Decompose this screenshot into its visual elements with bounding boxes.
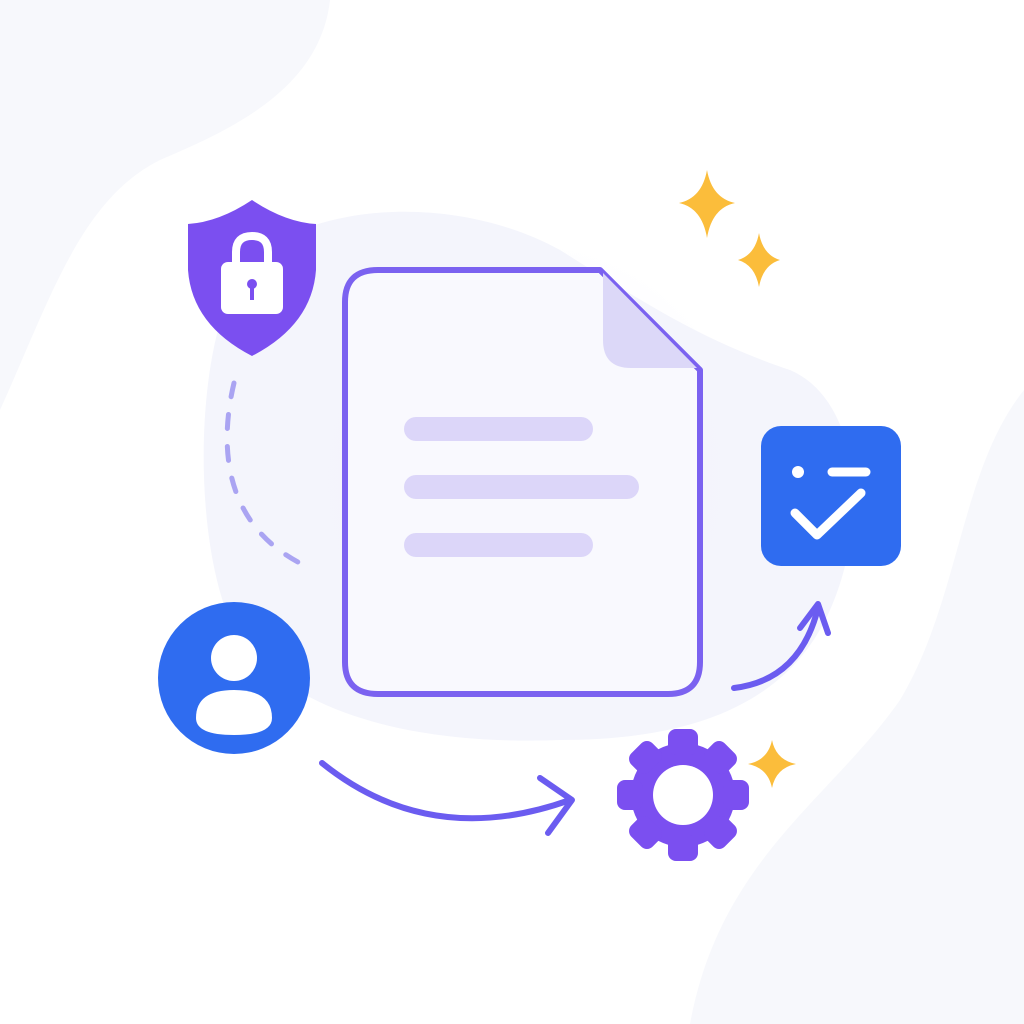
arrow: gear to checklist — [734, 604, 828, 688]
icon: gear — [617, 729, 749, 861]
icon: user — [158, 602, 310, 754]
sparkles — [679, 170, 796, 788]
background blob — [204, 212, 853, 741]
text lines — [416, 429, 627, 545]
icon: checklist — [761, 426, 901, 566]
arrow: user to gear — [322, 763, 572, 833]
folded corner — [603, 273, 697, 368]
icon: shield lock — [188, 200, 316, 356]
document — [345, 270, 700, 694]
dashed arc connector — [227, 383, 310, 568]
